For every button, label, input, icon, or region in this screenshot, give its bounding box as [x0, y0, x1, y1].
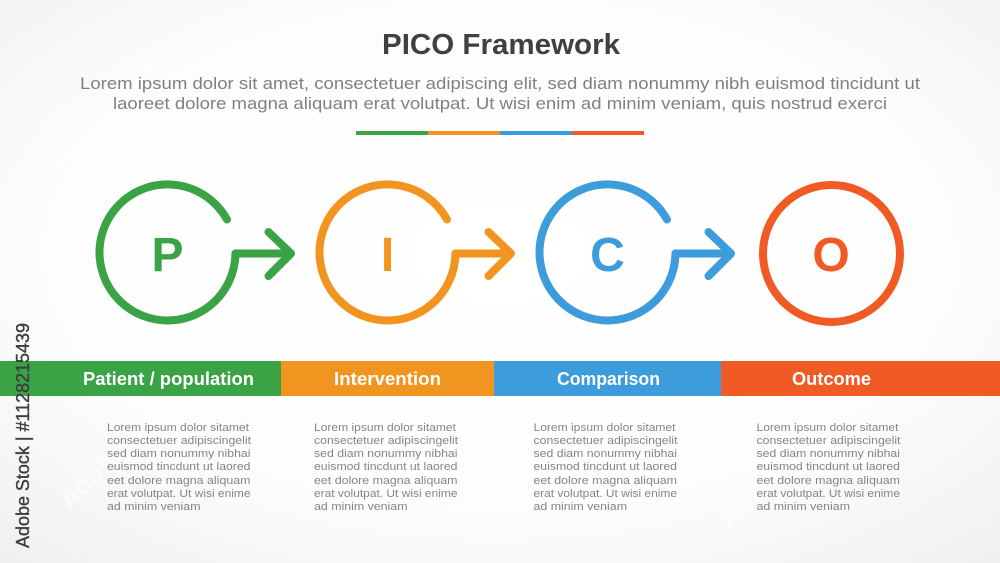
text block: Intervention — [314, 422, 459, 513]
band: Outcome: Outcome — [792, 369, 871, 389]
title: PICO Framework — [382, 29, 621, 61]
icon: P circle with arrow: P — [151, 229, 184, 282]
text block: Patient: eet dolore magna aliquam — [107, 475, 250, 487]
text block: Comparison: Lorem ipsum dolor sitamet — [534, 422, 676, 434]
text block: Comparison: erat volutpat. Ut wisi enime — [534, 488, 677, 500]
text block: Intervention: ad minim veniam — [314, 501, 408, 513]
text block: Outcome: erat volutpat. Ut wisi enime — [756, 488, 900, 500]
text block: Intervention: euismod tincdunt ut laored — [314, 461, 458, 473]
band: Comparison: Comparison — [557, 369, 660, 389]
text block: Comparison: eet dolore magna aliquam — [534, 475, 677, 487]
text block: Comparison: euismod tincdunt ut laored — [534, 461, 677, 473]
icon: I circle with arrow: I — [381, 229, 394, 282]
text block: Patient: sed diam nonummy nibhai — [107, 448, 250, 460]
text block: Intervention: erat volutpat. Ut wisi enime — [314, 488, 458, 500]
text: Adobe Stock — [373, 40, 507, 174]
text block: Patient: Lorem ipsum dolor sitamet — [107, 422, 250, 434]
text: Adobe Stock — [543, 210, 677, 344]
text block: Outcome: consectetuer adipiscingelit — [756, 435, 901, 447]
text block: Outcome: euismod tincdunt ut laored — [756, 461, 900, 473]
subtitle text: laoreet dolore magna aliquam erat volutpat. Ut wisi enim ad minim veniam, quis nostrud exerci — [113, 94, 887, 113]
text block: Patient: consectetuer adipiscingelit — [107, 435, 252, 447]
text block: Outcome: ad minim veniam — [756, 501, 850, 513]
text: Adobe Stock — [213, 210, 347, 344]
band: Comparison — [494, 361, 721, 396]
subtitle text — [80, 74, 920, 113]
text block: Comparison — [534, 422, 678, 513]
band: Outcome — [721, 361, 1000, 396]
text block: Outcome: Lorem ipsum dolor sitamet — [756, 422, 899, 434]
text: Adobe Stock — [703, 60, 837, 194]
text block: Comparison: sed diam nonummy nibhai — [534, 448, 677, 460]
text block: Comparison: ad minim veniam — [534, 501, 627, 513]
icon: O circle: O — [812, 229, 850, 282]
text block: Intervention: Lorem ipsum dolor sitamet — [314, 422, 457, 434]
subtitle text: Lorem ipsum dolor sit amet, consectetuer adipiscing elit, sed diam nonummy nibh euismod tincidunt ut — [80, 74, 920, 93]
icon: I circle with arrow — [320, 184, 511, 320]
band: Patient / population — [0, 361, 281, 396]
text block: Patient: ad minim veniam — [107, 501, 200, 513]
text block: Patient: euismod tincdunt ut laored — [107, 461, 250, 473]
text: Adobe Stock — [713, 400, 847, 534]
text block: Intervention: sed diam nonummy nibhai — [314, 448, 458, 460]
icon: C circle with arrow — [540, 184, 731, 320]
text block: Outcome — [756, 422, 901, 513]
text block: Intervention: consectetuer adipiscingelit — [314, 435, 459, 447]
text: Adobe Stock — [53, 380, 187, 514]
text block: Outcome: eet dolore magna aliquam — [756, 475, 900, 487]
text block: Comparison: consectetuer adipiscingelit — [534, 435, 678, 447]
text: Adobe Stock — [43, 40, 177, 174]
text: Adobe Stock — [383, 390, 517, 524]
band: Patient / population: Patient / population — [83, 369, 254, 389]
icon: C circle with arrow: C — [590, 229, 625, 282]
text block: Outcome: sed diam nonummy nibhai — [756, 448, 900, 460]
icon: O circle — [763, 185, 900, 322]
text block: Patient — [107, 422, 252, 513]
vertical stock credit: Adobe Stock | #1128215439 — [12, 323, 33, 548]
icon: P circle with arrow — [100, 184, 291, 320]
text block: Intervention: eet dolore magna aliquam — [314, 475, 458, 487]
title divider: four colours — [356, 131, 644, 135]
band: Intervention: Intervention — [334, 369, 441, 389]
text block: Patient: erat volutpat. Ut wisi enime — [107, 488, 250, 500]
band: Intervention — [281, 361, 494, 396]
